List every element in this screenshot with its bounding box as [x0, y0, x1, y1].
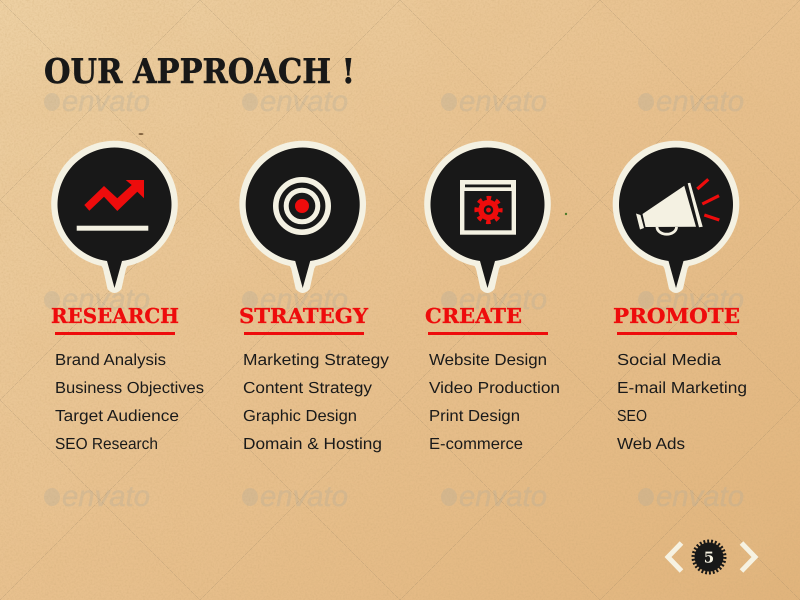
icon: previous arrow	[668, 543, 682, 571]
panel: strategy	[239, 141, 389, 453]
title: OUR APPROACH !	[44, 52, 355, 92]
list: strategy items: Graphic Design	[243, 408, 357, 425]
icon: strategy pin with target	[239, 141, 366, 293]
text: envato	[656, 284, 744, 316]
text: envato	[656, 86, 744, 118]
list: promote items: SEO	[617, 408, 647, 425]
list: strategy items: Domain & Hosting	[243, 436, 382, 453]
list: create items: Website Design	[429, 352, 547, 369]
heading: promote: PROMOTE	[613, 304, 740, 328]
page number badge: 5	[704, 548, 714, 566]
heading: create: CREATE	[425, 304, 522, 328]
list: strategy items	[243, 352, 389, 453]
list: create items	[429, 352, 560, 453]
icon: create pin with window and gear	[424, 141, 551, 293]
text: envato	[62, 481, 150, 513]
text: envato	[459, 86, 547, 118]
icon: research pin with rising chart	[51, 141, 178, 293]
text: envato	[62, 86, 150, 118]
text: envato	[656, 481, 744, 513]
list: strategy items: Marketing Strategy	[243, 352, 389, 369]
text: envato	[62, 284, 150, 316]
list: promote items: E-mail Marketing	[617, 380, 747, 397]
heading: strategy: STRATEGY	[239, 304, 368, 328]
panel: create	[424, 141, 560, 453]
navigation: pager	[668, 541, 755, 573]
list: research items: Business Objectives	[55, 380, 204, 397]
text: envato	[260, 481, 348, 513]
list: create items: E-commerce	[429, 436, 523, 453]
list: research items: Target Audience	[55, 408, 179, 425]
panel: promote	[613, 141, 747, 453]
icon: next arrow	[742, 543, 755, 571]
list: strategy items: Content Strategy	[243, 380, 372, 397]
list: promote items: Web Ads	[617, 436, 685, 453]
list: promote items	[617, 352, 747, 453]
text: envato	[260, 86, 348, 118]
panel: research	[51, 141, 204, 453]
text: envato	[459, 284, 547, 316]
list: promote items: Social Media	[617, 352, 721, 369]
list: create items: Print Design	[429, 408, 520, 425]
text: envato	[459, 481, 547, 513]
heading: research: RESEARCH	[51, 304, 179, 328]
list: create items: Video Production	[429, 380, 560, 397]
icon: promote pin with megaphone	[613, 141, 739, 293]
list: research items: SEO Research	[55, 436, 158, 453]
list: research items	[55, 352, 204, 453]
list: research items: Brand Analysis	[55, 352, 166, 369]
text: envato	[260, 284, 348, 316]
